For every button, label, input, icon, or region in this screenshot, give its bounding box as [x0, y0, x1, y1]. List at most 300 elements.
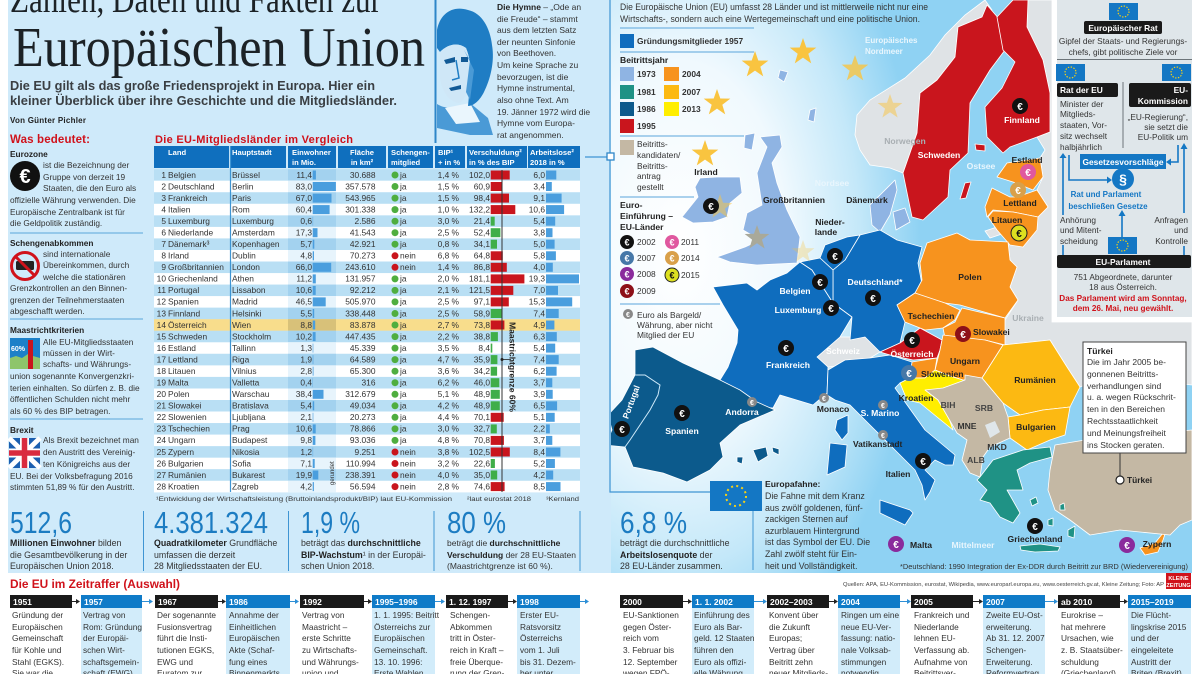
row: Kroatien: 56.594	[350, 481, 376, 491]
row: Litauen: 6,2	[533, 366, 545, 376]
note: rounded: gerundet	[330, 461, 336, 485]
row: Tschechien: 32,7	[474, 424, 490, 434]
row: Slowenien: 2,1	[300, 412, 312, 422]
hymn text: 19. Jänner 1972 wird die	[497, 107, 590, 117]
row: Estland: 16	[157, 343, 166, 353]
row: Großbritannien: 66,0	[296, 262, 312, 272]
map labels: Estland	[1011, 155, 1043, 165]
map labels: Polen	[958, 272, 982, 282]
row: Italien: 132,2	[469, 204, 490, 214]
Council description: Minister der	[1060, 99, 1104, 109]
legend: antrag	[637, 171, 661, 181]
entry: 2005: 2005	[914, 597, 933, 607]
row: Spanien: 15,3	[529, 297, 545, 307]
row: Bulgarien: 7,1	[300, 458, 312, 468]
legend: 2009	[637, 286, 656, 296]
row: Schweden: 447.435	[345, 331, 376, 341]
row: Österreich: 73,8	[474, 320, 490, 330]
table header row: Einwohner	[292, 148, 331, 157]
table header row: BIP¹	[438, 148, 454, 157]
election note: Das Parlament wird am Sonntag,	[1059, 294, 1187, 303]
row: Griechenland: 131.957	[345, 274, 376, 284]
block: Schengenabkommen	[10, 238, 130, 316]
row: Deutschland: 357.578	[345, 181, 376, 191]
row: Estland: Estland	[168, 343, 196, 353]
callout: Türkei: Türkei	[1127, 475, 1152, 485]
map labels: *Deutschland: 1990 Integration der Ex-DDR durch Beitritt zur BRD (Wiedervereinigung)	[900, 562, 1188, 571]
1973 members: UK, Ireland, Denmark	[682, 70, 910, 265]
entry: 2002–2003	[767, 595, 838, 674]
row: Luxemburg: 5	[161, 216, 166, 226]
row: Italien: Rom	[232, 204, 250, 214]
entry: 1. 12. 1997	[446, 595, 517, 674]
euro coins on the map: €	[960, 330, 966, 341]
row: Malta: 19	[157, 378, 166, 388]
row: Bulgarien	[154, 458, 580, 469]
Maastricht limit line	[500, 170, 516, 492]
block: Eurozone: Staaten, die den Euro als	[43, 183, 136, 193]
row: Dänemark: 7	[161, 239, 166, 249]
row: Österreich: 83.878	[350, 320, 376, 330]
hymn text: von Beethoven.	[497, 48, 556, 58]
row: Bulgarien: 26	[157, 458, 166, 468]
row: Großbritannien: nein	[400, 262, 416, 272]
legend: 2014	[681, 253, 700, 263]
row: Deutschland: Berlin	[232, 181, 254, 191]
row: Griechenland: 10	[157, 274, 166, 284]
row: Rumänien	[154, 469, 580, 481]
row: Polen: Warschau	[232, 389, 270, 399]
flag: Parliament	[1108, 237, 1137, 254]
entry: 1995–1996: Gemeinschaft.	[374, 645, 428, 655]
row: Slowenien: Ljubljana	[232, 412, 266, 422]
block: Eurozone: Europäische Zentralbank ist für	[10, 207, 125, 217]
heading: Was bedeutet:	[10, 134, 90, 146]
row: Slowakei	[154, 400, 580, 412]
entry: 1951: Gründung der	[12, 610, 63, 620]
row: Kroatien: nein	[400, 481, 416, 491]
entry: 1. 1. 2002	[692, 595, 767, 674]
entry: 1957: schaftsgemein-	[83, 657, 139, 667]
entry: ab 2010: Ursachen, wie	[1061, 633, 1114, 643]
euro coins on the map: €	[822, 396, 826, 403]
stat: population: die Gesamtbevölkerung in der	[10, 550, 127, 560]
entry: 1. 1. 2002: Euro als offizi-	[694, 657, 747, 667]
row: Frankreich: 3	[161, 193, 166, 203]
map labels: Tschechien	[908, 311, 954, 321]
block: Eurozone: die Geldpolitik zuständig.	[10, 218, 102, 228]
legend: Einführung –	[620, 211, 673, 221]
Commission description: EU-Politik um	[1138, 132, 1188, 142]
euro coins on the map: €	[881, 403, 885, 410]
entry: 2015–2019: lingskrise 2015	[1131, 622, 1187, 632]
euro coins on the map: €	[906, 369, 912, 380]
row: Irland: Irland	[168, 251, 189, 261]
entry: 2004: Ringen um eine	[841, 610, 900, 620]
row: Slowakei: 4,2 %	[438, 401, 460, 411]
map labels: Ungarn	[950, 356, 980, 366]
Parliament description: 751 Abgeordnete, darunter	[1074, 272, 1173, 282]
row: Großbritannien: 9	[161, 262, 166, 272]
row: Italien: 4	[161, 204, 166, 214]
block: Eurozone: Eurozone	[10, 149, 48, 159]
row: Frankreich: ja	[399, 193, 407, 203]
row: Zypern	[154, 446, 580, 458]
panel: Was bedeutet	[9, 134, 143, 492]
row: Kroatien: 4,2	[300, 481, 312, 491]
entry: 1967: Fusionsvertrag	[157, 622, 212, 632]
Gesetzesvorschläge label: Gesetzesvorschläge	[1082, 157, 1164, 167]
map labels: MNE	[957, 421, 977, 431]
Council description: halbjährlich	[1060, 142, 1102, 152]
row: Bulgarien: Sofia	[232, 458, 251, 468]
2007 members	[982, 340, 1080, 450]
flags: Council and Commission	[1056, 64, 1191, 81]
entry: 1951: 1951	[13, 597, 32, 607]
arrows between institutions	[1063, 145, 1184, 255]
row: Österreich	[154, 319, 580, 331]
row: Luxemburg: ja	[399, 216, 407, 226]
row: Deutschland: 83,0	[296, 181, 312, 191]
block: Schengenabkommen: grenzen der Teilnehmerstaaten	[10, 295, 125, 305]
row: Rumänien: 238.391	[345, 470, 376, 480]
block: Maastrichtkriterien	[10, 325, 140, 416]
row: Niederlande: ja	[399, 227, 407, 237]
row: Deutschland	[154, 181, 580, 192]
map labels: Portugal	[621, 384, 642, 420]
Council description: staaten, Vor-	[1060, 120, 1107, 130]
map introduction text: Die Europäische Union (EU) umfasst 28 Länder und ist mittlerweile nicht nur eine	[620, 2, 928, 12]
EU-Parlament label: EU-Parlament	[1096, 257, 1151, 267]
block: Eurozone: offizielle Währung verwenden. Die	[10, 195, 136, 205]
entry: 1998: Österreichs	[520, 633, 562, 643]
stat: unemployment: 28 EU-Länder zusammen.	[620, 561, 723, 571]
row: Finnland: 338.448	[345, 308, 376, 318]
EU-Kommission label: EU-	[1174, 85, 1188, 95]
entry: 1986: fung eines	[229, 657, 267, 667]
row: Belgien: Brüssel	[232, 170, 260, 180]
entry: 2007: erweiterung.	[986, 622, 1032, 632]
row: Slowenien: 70,1	[474, 412, 490, 422]
row: Österreich: 2,7 %	[438, 320, 460, 330]
Rat und Parlament text: beschließen Gesetze	[1068, 202, 1148, 211]
entry: 2000	[620, 595, 692, 674]
entry: 1951	[10, 595, 80, 674]
entry: 2000: EU-Sanktionen	[623, 610, 679, 620]
logo: Kleine Zeitung	[1166, 573, 1191, 589]
Parliament description: 18 aus Österreich.	[1089, 282, 1157, 292]
row: Kroatien: 74,6	[474, 481, 490, 491]
row: Tschechien: Tschechien	[168, 424, 210, 434]
row: Griechenland: Griechenland	[168, 274, 218, 284]
stat: area	[154, 505, 277, 571]
Gesetzesvorschläge label	[1080, 154, 1166, 169]
stat: unemployment: beträgt die durchschnittliche	[620, 538, 730, 548]
table header row: Arbeitslose²	[530, 148, 574, 157]
map labels: Litauen	[992, 215, 1022, 225]
row: Niederlande: 2,5 %	[438, 227, 460, 237]
row: Griechenland: Athen	[232, 274, 254, 284]
legend: 2015	[681, 270, 700, 280]
row: Portugal: 10,6	[296, 285, 312, 295]
legend: 1995	[637, 121, 656, 131]
row: Finnland: 13	[157, 308, 166, 318]
row: Lettland: 17	[157, 354, 166, 364]
map labels: Lettland	[1003, 198, 1037, 208]
euro coins on the map: €	[1032, 522, 1038, 533]
map labels: Ostsee	[967, 161, 996, 171]
stat: GDP growth	[301, 505, 426, 571]
legend: kandidaten/	[637, 150, 681, 160]
row: Bulgarien: 110.994	[346, 458, 376, 468]
map labels: Slowenien	[921, 369, 964, 379]
row: Bulgarien: 3,2 %	[438, 458, 460, 468]
intro text: Die EU gilt als das große Friedensprojekt in Europa. Hier ein	[10, 79, 375, 93]
row: Estland: 8,4	[478, 343, 490, 353]
map labels: BIH	[941, 400, 955, 410]
entry: 1967: EWG und	[157, 657, 193, 667]
entry: 1. 1. 2002: 1. 1. 2002	[695, 597, 733, 607]
map labels: Bulgarien	[1016, 422, 1056, 432]
row: Kroatien: Kroatien	[168, 481, 200, 491]
row: Deutschland: 1,5 %	[438, 181, 460, 191]
EU-Kommission label: Kommission	[1138, 96, 1188, 106]
row: Österreich: 4,9	[533, 320, 545, 330]
row: Finnland: 2,5 %	[438, 308, 460, 318]
block: Maastrichtkriterien: als 60 % des BIP betragen.	[10, 406, 110, 416]
row: Slowakei: Slowakei	[168, 401, 202, 411]
stat: GDP growth: beträgt das	[301, 538, 347, 548]
row: Tschechien: 2,2	[533, 424, 545, 434]
stat: GDP growth: BIP-Wachstum	[301, 550, 363, 560]
block: Schengenabkommen: sind internationale	[43, 249, 111, 259]
table header row: Land	[168, 148, 187, 157]
row: Polen: Polen	[168, 389, 190, 399]
hymn text: bevorzugen, ist die	[497, 72, 569, 82]
stat: unemployment: Arbeitslosenquote	[620, 550, 697, 560]
table header row: Schengen-	[391, 148, 430, 157]
row: Dänemark: 5,0	[533, 239, 545, 249]
legend: 1986	[637, 104, 656, 114]
entry: 2000: reich vom	[623, 633, 659, 643]
row: Estland: Tallinn	[232, 343, 256, 353]
entry: 1. 12. 1997: tritt in Öster-	[450, 633, 496, 643]
Anfragen text: und	[1174, 225, 1188, 235]
entry: ab 2010: Eurokrise –	[1061, 610, 1103, 620]
row: Luxemburg: 2.586	[355, 216, 376, 226]
row: Italien: Italien	[168, 204, 191, 214]
callout: Türkei: gonnenen Beitritts-	[1087, 369, 1159, 379]
Europafahne block: ist das Symbol der EU. Die	[765, 537, 870, 547]
row: Irland	[154, 250, 580, 262]
block: Maastrichtkriterien: 60%	[11, 346, 26, 353]
row: Schweden: 6,3	[533, 331, 545, 341]
entry: 1998: Erster EU-	[520, 610, 559, 620]
stat: population: 512,6	[10, 505, 72, 540]
row: Belgien: 11,4	[296, 170, 312, 180]
logo: Kleine Zeitung: KLEINE	[1168, 576, 1189, 582]
map labels: Norwegen	[884, 136, 926, 146]
panel: light blue background	[8, 0, 611, 573]
block: Schengenabkommen: Übereinkommen, durch	[43, 260, 130, 270]
EU-Parlament label	[1057, 255, 1191, 268]
entry: ab 2010: ab 2010	[1061, 597, 1092, 607]
row: Polen	[154, 388, 580, 400]
row: Rumänien: 35,0	[474, 470, 490, 480]
map labels: Monaco	[817, 404, 849, 414]
entry: 2007: Erweiterung.	[986, 657, 1033, 667]
row: Griechenland: 181,1	[469, 274, 490, 284]
map labels: Deutschland*	[848, 277, 903, 287]
row: Dänemark: Dänemark³	[168, 239, 210, 249]
row: Bulgarien: nein	[400, 458, 416, 468]
row: Finnland	[154, 308, 580, 319]
map labels: Dänemark	[846, 195, 888, 205]
entry: 2002–2003: die Zukunft	[769, 622, 811, 632]
row: Griechenland: 19,3	[529, 274, 545, 284]
row: Rumänien: Bukarest	[232, 470, 266, 480]
map labels: Frankreich	[766, 360, 810, 370]
row: Dänemark: Kopenhagen	[232, 239, 280, 249]
row: Lettland: 1,9	[300, 354, 312, 364]
row: Tschechien	[154, 423, 580, 435]
entry: 1. 12. 1997: Schengen-	[450, 610, 490, 620]
row: Luxemburg: Luxemburg	[232, 216, 274, 226]
row: Slowakei: 21	[157, 401, 166, 411]
hymn text: aus dem letzten Satz	[497, 25, 576, 35]
row: Ungarn: ja	[399, 435, 407, 445]
map labels: SRB	[975, 403, 993, 413]
callout: Türkei: ins Stocken geraten.	[1087, 440, 1164, 450]
row: Finnland: Helsinki	[232, 308, 261, 318]
entry: 1992: Maastricht –	[302, 622, 348, 632]
row: Tschechien: 78.866	[350, 424, 376, 434]
entry: 1995–1996: 1995–1996	[375, 597, 418, 607]
row: Ungarn: Ungarn	[168, 435, 196, 445]
arrow heads	[1060, 143, 1188, 216]
block: Brexit: stimmten 51,89 % für den Austritt.	[10, 482, 135, 492]
row: Irland: 8	[161, 251, 166, 261]
stat: population	[10, 505, 127, 571]
row: Portugal: Portugal	[168, 285, 199, 295]
Rat der EU label	[1057, 83, 1118, 97]
row: Zypern: 3,8 %	[438, 447, 460, 457]
stats row	[10, 505, 730, 571]
entry: 1986: Europäischen	[229, 633, 280, 643]
row: Malta: 6,2 %	[438, 378, 460, 388]
row: Irland: nein	[400, 251, 416, 261]
row: Lettland: 35,9	[474, 354, 490, 364]
1981 member: Greece	[977, 447, 1075, 552]
legend: 2011	[681, 237, 699, 247]
row: Spanien: Madrid	[232, 297, 258, 307]
row: Slowakei: 5,4	[300, 401, 312, 411]
block: Maastrichtkriterien: Maastrichtkriterien	[10, 325, 84, 335]
row: Estland: 1,3	[300, 343, 312, 353]
entry: 1. 12. 1997: freie Überque-	[450, 657, 503, 667]
map labels: Schweden	[918, 150, 960, 160]
entry: 1967: 1967	[158, 597, 177, 607]
entry: 1995–1996: 13. 10. 1996:	[374, 657, 422, 667]
entry: 1986: 1986	[229, 597, 248, 607]
block: Maastrichtkriterien: union sogenannte Konvergenzkri-	[10, 371, 134, 381]
legend: €	[624, 270, 630, 280]
row: Großbritannien: London	[232, 262, 260, 272]
entry: 2002–2003: Europas;	[769, 633, 802, 643]
map labels	[621, 36, 1188, 571]
row: Polen: 5,1 %	[438, 389, 460, 399]
entry: 2005: lehnen EU-	[914, 633, 956, 643]
entry: 1957: der Europäi-	[83, 633, 129, 643]
row: Malta: 0,4	[300, 378, 312, 388]
row: Zypern: 102,5	[469, 447, 490, 457]
row: Estland: 45.339	[350, 343, 376, 353]
row: Polen: 20	[157, 389, 166, 399]
entry: 2015–2019: Die Flücht-	[1131, 610, 1171, 620]
callout: Türkei: verhandlungen sind	[1087, 381, 1161, 391]
row: Malta: 3,7	[533, 378, 545, 388]
hymn text: rat angenommen.	[497, 130, 564, 140]
entry: 2004: nale Volksab-	[841, 645, 891, 655]
callout: Türkei: Die im Jahr 2005 be-	[1087, 357, 1166, 367]
intro text: kleiner Überblick über ihre Geschichte und die Mitgliedsländer.	[10, 93, 397, 108]
stat: debt: der 28 EU-Staaten	[503, 550, 576, 560]
row: Kroatien: 8,5	[533, 481, 545, 491]
map labels: Andorra	[725, 407, 759, 417]
row: Lettland	[154, 354, 580, 365]
table footnotes: ³Kernland	[546, 496, 579, 503]
row: Zypern: Zypern	[168, 447, 194, 457]
row: Österreich: Wien	[232, 320, 251, 330]
entry: 2000: 3. Februar bis	[623, 645, 674, 655]
entry: 1957: schen Wirt-	[83, 645, 125, 655]
row: Griechenland: 2,0 %	[438, 274, 460, 284]
entry: 1967: Der sogenannte	[157, 610, 216, 620]
entry: 2007	[983, 595, 1058, 674]
row: Belgien: Belgien	[168, 170, 196, 180]
row: Slowakei: ja	[399, 401, 407, 411]
row: Litauen: 2,8	[300, 366, 312, 376]
block: Maastrichtkriterien: terien einhalten. So dürfen z. B. die	[10, 383, 140, 393]
flag: European Council	[1109, 3, 1138, 20]
row: Spanien: 12	[157, 297, 166, 307]
stat: area: Grundfläche	[227, 538, 277, 548]
legend: Euro-	[620, 200, 643, 210]
row: Slowenien	[154, 412, 580, 423]
map labels: S. Marino	[861, 408, 899, 418]
Europafahne block: heit und Vollständigkeit.	[765, 561, 857, 571]
entry: 2007: Schengen-	[986, 645, 1026, 655]
intro text	[10, 79, 397, 125]
entry: 2002–2003: 2002–2003	[770, 597, 813, 607]
row: Portugal: 11	[157, 285, 166, 295]
euro coins on the map: €	[832, 252, 838, 263]
entry: 1. 1. 2002: führen den	[694, 645, 734, 655]
map labels: Spanien	[665, 426, 699, 436]
hymn text: also ohne Text. Am	[497, 95, 569, 105]
Council description: sitz wechselt	[1060, 131, 1108, 141]
stat: GDP growth: schen Union 2018.	[301, 561, 374, 571]
map labels: Europäisches	[865, 36, 918, 45]
row: Frankreich	[154, 192, 580, 204]
row: Frankreich: 67,0	[296, 193, 312, 203]
icon: portrait of Beethoven	[437, 9, 493, 135]
row: Tschechien: 23	[157, 424, 166, 434]
map labels: Schweiz	[826, 346, 860, 356]
legend: €	[624, 254, 630, 264]
table header row: in km²	[351, 158, 374, 167]
map labels: ALB	[967, 455, 985, 465]
